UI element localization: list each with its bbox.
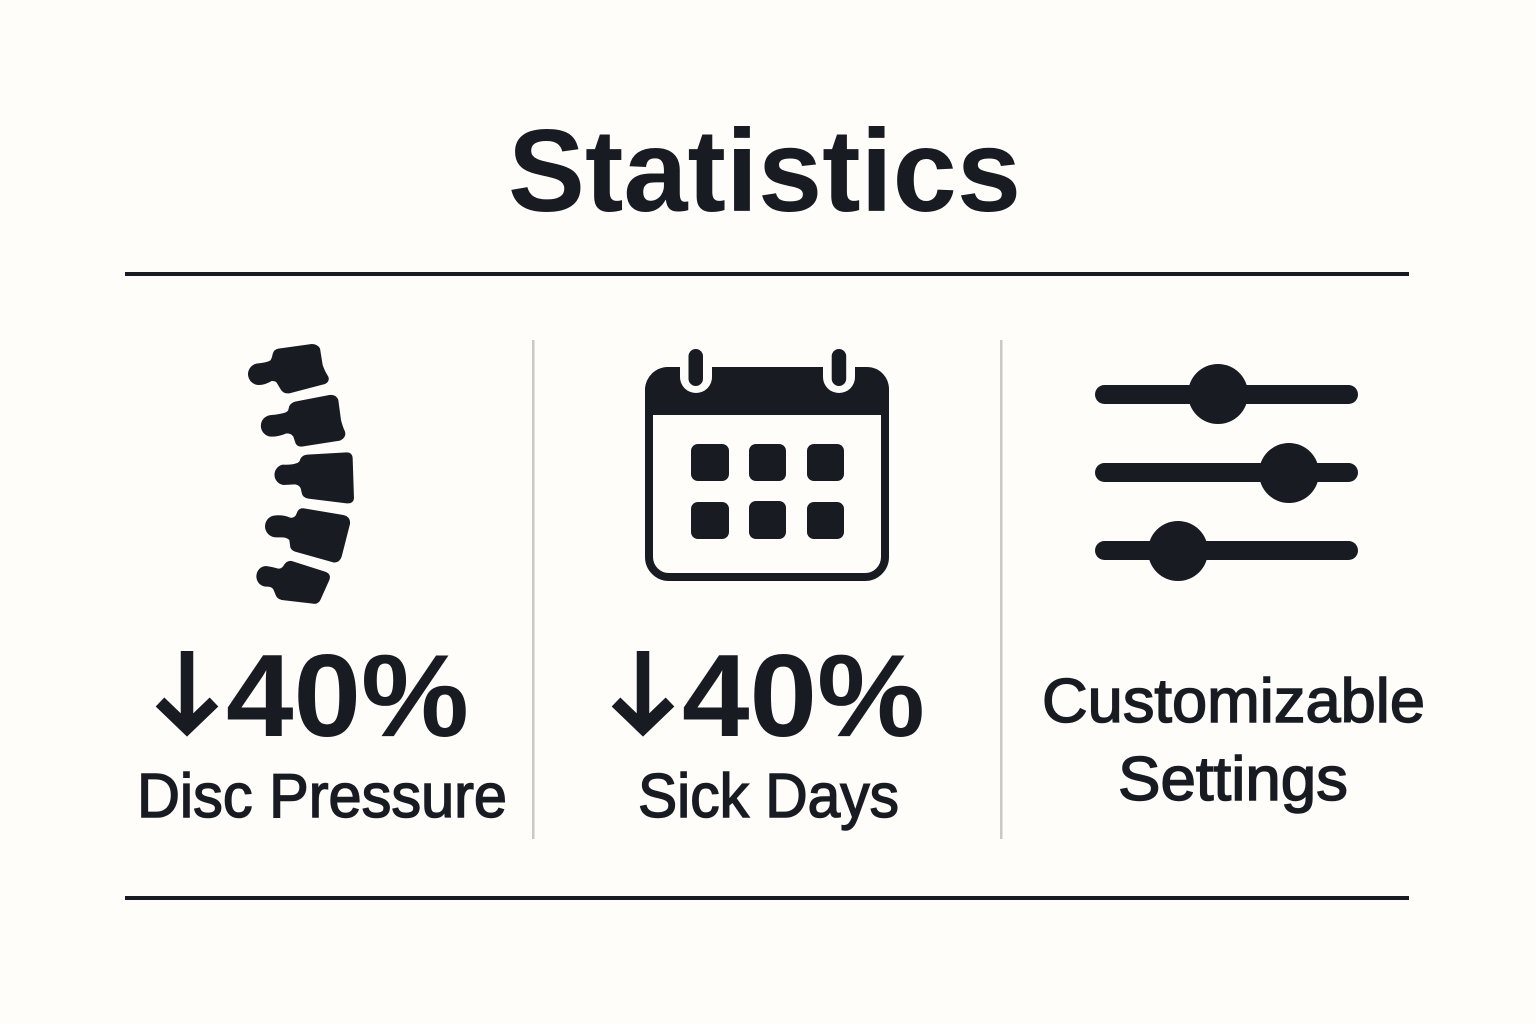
arrow: down bbox=[160, 651, 214, 728]
icon: spine bbox=[248, 344, 354, 604]
title: Statistics bbox=[508, 105, 1021, 236]
panel: disc pressure bbox=[137, 344, 507, 831]
arrow: down bbox=[616, 651, 670, 728]
label: customizable settings: Settings bbox=[1118, 745, 1348, 814]
stat: down 40 percent: 40% bbox=[226, 630, 469, 761]
panel: sick days bbox=[616, 349, 925, 831]
icon: calendar bbox=[645, 349, 889, 577]
label: customizable settings: Customizable bbox=[1042, 667, 1425, 736]
label: disc pressure: Disc Pressure bbox=[137, 762, 507, 831]
stat: down 40 percent: 40% bbox=[682, 630, 925, 761]
panel: customizable settings bbox=[1042, 364, 1425, 814]
label: sick days: Sick Days bbox=[638, 762, 899, 831]
label: customizable settings bbox=[1042, 667, 1425, 814]
icon: sliders bbox=[1095, 364, 1358, 581]
